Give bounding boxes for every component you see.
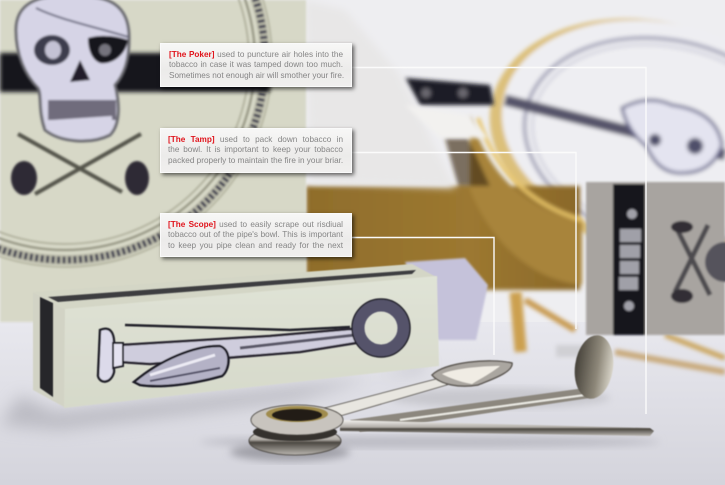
folded lilac paper: [405, 258, 488, 340]
shadow under long box: [0, 360, 430, 430]
callout: the scope: [The Scope] used to easily scrape out risdiual: [168, 220, 343, 228]
crossed pipes: [18, 134, 141, 194]
callout: the tamp: the bowl. It is important to keep your tobacco: [168, 145, 343, 154]
tool shadow: [200, 436, 660, 448]
table surface: [0, 322, 725, 485]
right blurred box: [586, 182, 725, 335]
callout: the poker: [The Poker] used to puncture air holes into the: [169, 50, 343, 58]
tools: tamp, scoop and poker: [200, 333, 660, 461]
blurred right tin: [468, 0, 725, 280]
left cream box with skull: [0, 0, 306, 322]
callout: the poker: [160, 43, 352, 87]
black tin band: [405, 78, 494, 105]
tool drawing: [98, 299, 410, 386]
callout: the poker: tobacco in case it was tamped down too much.: [169, 60, 343, 69]
callout: the tamp: packed properly to maintain the fire in your briar.: [168, 156, 343, 165]
scoop arm and bowl: [325, 361, 512, 416]
upper ring: [251, 405, 343, 435]
lower ring: [249, 427, 341, 455]
poker rod: [340, 420, 654, 436]
matches: [510, 292, 725, 372]
box end: [33, 292, 66, 408]
callout: the scope: to keep you pipe clean and ready for the next: [168, 241, 343, 250]
brown box: [306, 115, 582, 290]
callout: the poker: Sometimes not enough air will smother your fire.: [169, 71, 344, 80]
box top: [34, 264, 438, 312]
black band: [0, 53, 270, 92]
connector line: tamp: [352, 152, 576, 329]
white paper fold: [305, 0, 455, 188]
skull: [16, 0, 129, 141]
callout: the tamp: [160, 128, 352, 173]
tamp arm and disc: [350, 333, 617, 432]
callout: the tamp: [The Tamp] used to pack down tobacco in: [168, 134, 343, 144]
connector line: scope: [352, 238, 494, 355]
callout: the scope: tobacco out of the pipe's bowl. This is important: [168, 230, 343, 239]
callout: the scope: [160, 213, 352, 257]
long box with tool drawing: [33, 264, 439, 408]
connector line: poker: [352, 68, 646, 414]
tin ring: [0, 0, 272, 267]
box front: [64, 276, 439, 408]
